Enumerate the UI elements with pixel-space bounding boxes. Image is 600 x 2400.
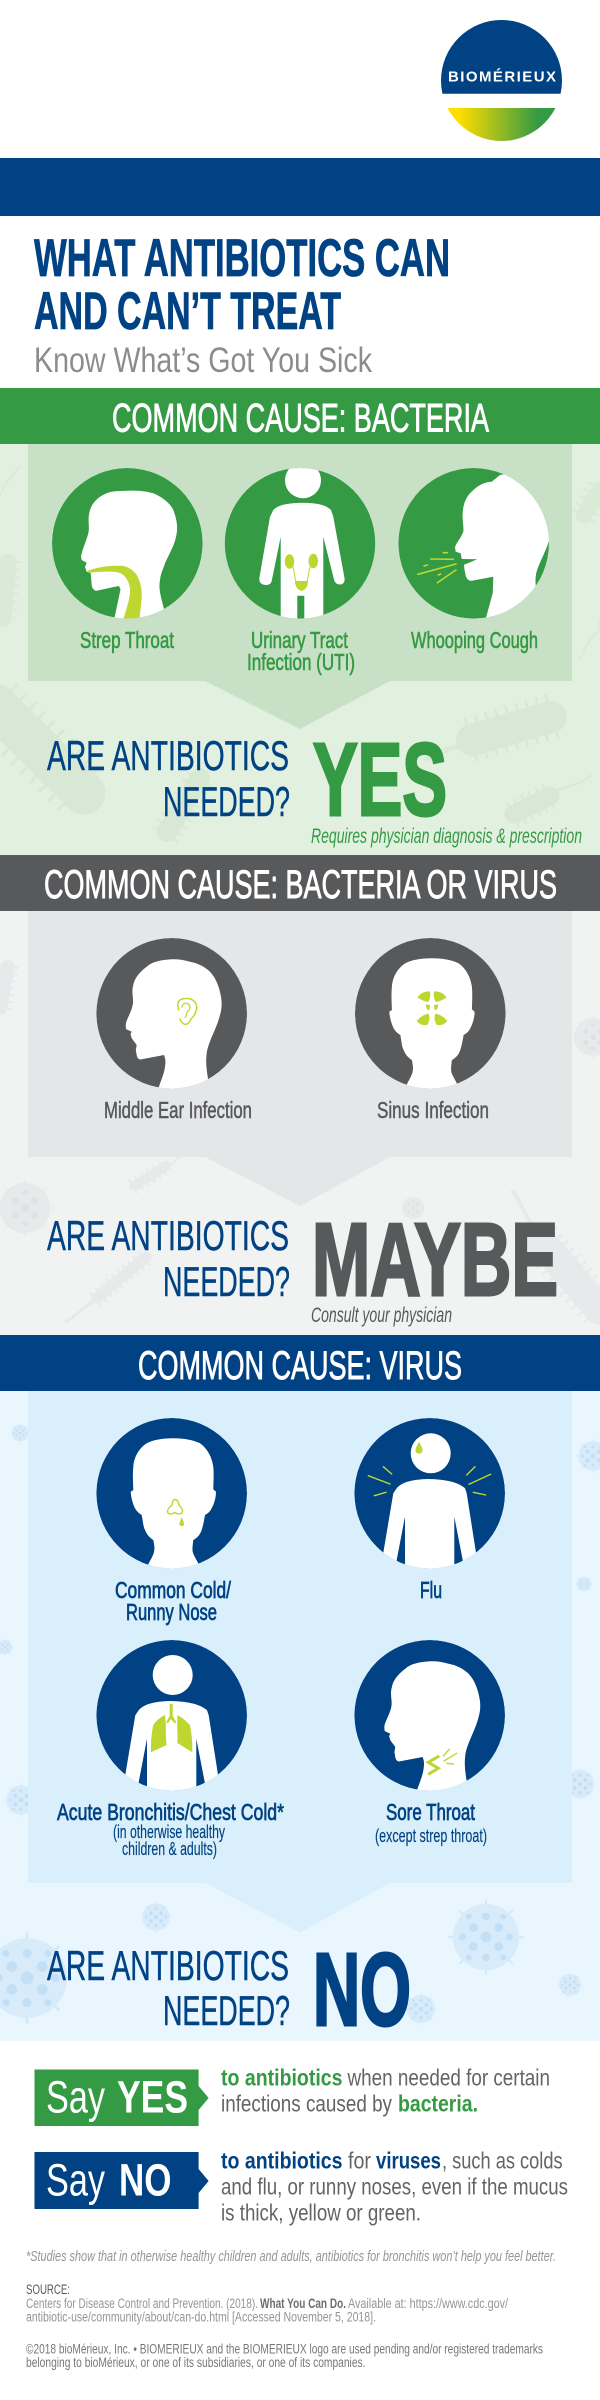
question: NEEDED? [163, 1987, 290, 2034]
subtitle: Know What’s Got You Sick [34, 341, 372, 380]
logo: bioMérieux: BIOMÉRIEUX [448, 68, 556, 86]
title: AND CAN’T TREAT [34, 282, 341, 341]
labels: Urinary Tract [251, 627, 348, 653]
question: NEEDED? [163, 1258, 290, 1305]
question [47, 732, 290, 825]
panel with pointer [28, 911, 572, 1206]
text: say yes [221, 2065, 550, 2117]
logo: bioMérieux [441, 20, 562, 141]
section: bacteria [0, 388, 600, 855]
icon: middle ear [96, 938, 247, 1090]
copyright [26, 2341, 543, 2370]
tag: say no: NO [119, 2154, 172, 2206]
note: consult physician: Consult your physician [311, 1304, 452, 1327]
decorative viruses [0, 1423, 600, 2025]
section: bacteria or virus [0, 855, 600, 1335]
icon: strep throat [52, 468, 203, 625]
question: ARE ANTIBIOTICS [47, 1942, 289, 1989]
header bar [0, 388, 600, 444]
panel with pointer [28, 1391, 572, 1932]
tag: say yes [34, 2070, 209, 2126]
labels: Strep Throat [80, 627, 174, 653]
source [26, 2282, 508, 2325]
labels: Common Cold/ [115, 1577, 231, 1603]
labels [104, 1097, 489, 1123]
labels: Sinus Infection [377, 1097, 489, 1123]
question: ARE ANTIBIOTICS [47, 732, 289, 779]
text: say yes: bacteria. [398, 2091, 478, 2117]
icon: sore throat [354, 1640, 505, 1792]
tag: say yes: Say [46, 2071, 105, 2122]
tag: say no: Say [46, 2154, 105, 2206]
say yes callout [34, 2065, 550, 2126]
labels: Flu [420, 1577, 442, 1603]
text: say no: viruses [376, 2148, 441, 2174]
labels: Infection (UTI) [247, 649, 355, 675]
section background [0, 1391, 600, 2041]
answer: yes: YES [313, 722, 447, 837]
panel with pointer [28, 444, 572, 729]
header bar [0, 1335, 600, 1391]
text: say yes: when needed for certain [347, 2065, 550, 2091]
section background [0, 444, 600, 855]
text: say yes: infections caused by [221, 2091, 392, 2117]
text: say no: , such as colds [442, 2148, 563, 2174]
source: antibiotic-use/community/about/can-do.html [Accessed November 5, 2018]. [26, 2310, 376, 2325]
labels: (except strep throat) [375, 1826, 487, 1846]
icon: common cold [96, 1418, 247, 1570]
question: NEEDED? [163, 778, 290, 825]
text: say no: is thick, yellow or green. [221, 2200, 421, 2226]
labels: (in otherwise healthy [113, 1822, 225, 1842]
icon: urinary tract [225, 462, 375, 625]
source: Available at: https://www.cdc.gov/ [348, 2296, 508, 2311]
source: SOURCE: [26, 2282, 70, 2297]
decorative bacteria [0, 466, 600, 835]
question [47, 1212, 290, 1305]
labels: Middle Ear Infection [104, 1097, 252, 1123]
icon: acute bronchitis [96, 1640, 247, 1797]
labels: Runny Nose [126, 1599, 217, 1625]
decorative germs [0, 965, 600, 1322]
copyright: belonging to bioMérieux, or one of its subsidiaries, or one of its companies. [26, 2355, 366, 2370]
tag: say no [34, 2152, 209, 2209]
labels: children & adults) [122, 1839, 217, 1859]
title [34, 229, 450, 341]
text: say no: to antibiotics [221, 2148, 342, 2174]
labels: Sore Throat [386, 1799, 475, 1825]
source: What You Can Do. [260, 2296, 346, 2311]
icon: whooping cough [398, 468, 549, 618]
section background [0, 911, 600, 1335]
text: say no: for [348, 2148, 371, 2174]
labels: Whooping Cough [411, 627, 538, 653]
source: Centers for Disease Control and Prevention. (2018). [26, 2296, 258, 2311]
icon: sinus [355, 938, 506, 1090]
top blue band [0, 158, 600, 216]
question: ARE ANTIBIOTICS [47, 1212, 289, 1259]
labels [57, 1577, 487, 1859]
labels [80, 627, 538, 675]
tag: say yes: YES [117, 2071, 188, 2122]
text: say yes: to antibiotics [221, 2065, 342, 2091]
icon: flu [354, 1418, 505, 1575]
answer: no: NO [313, 1932, 411, 2047]
labels: Acute Bronchitis/Chest Cold* [57, 1799, 284, 1825]
say no callout [34, 2148, 568, 2226]
text: say no [221, 2148, 568, 2226]
question [47, 1942, 290, 2034]
section: virus [0, 1335, 600, 2047]
